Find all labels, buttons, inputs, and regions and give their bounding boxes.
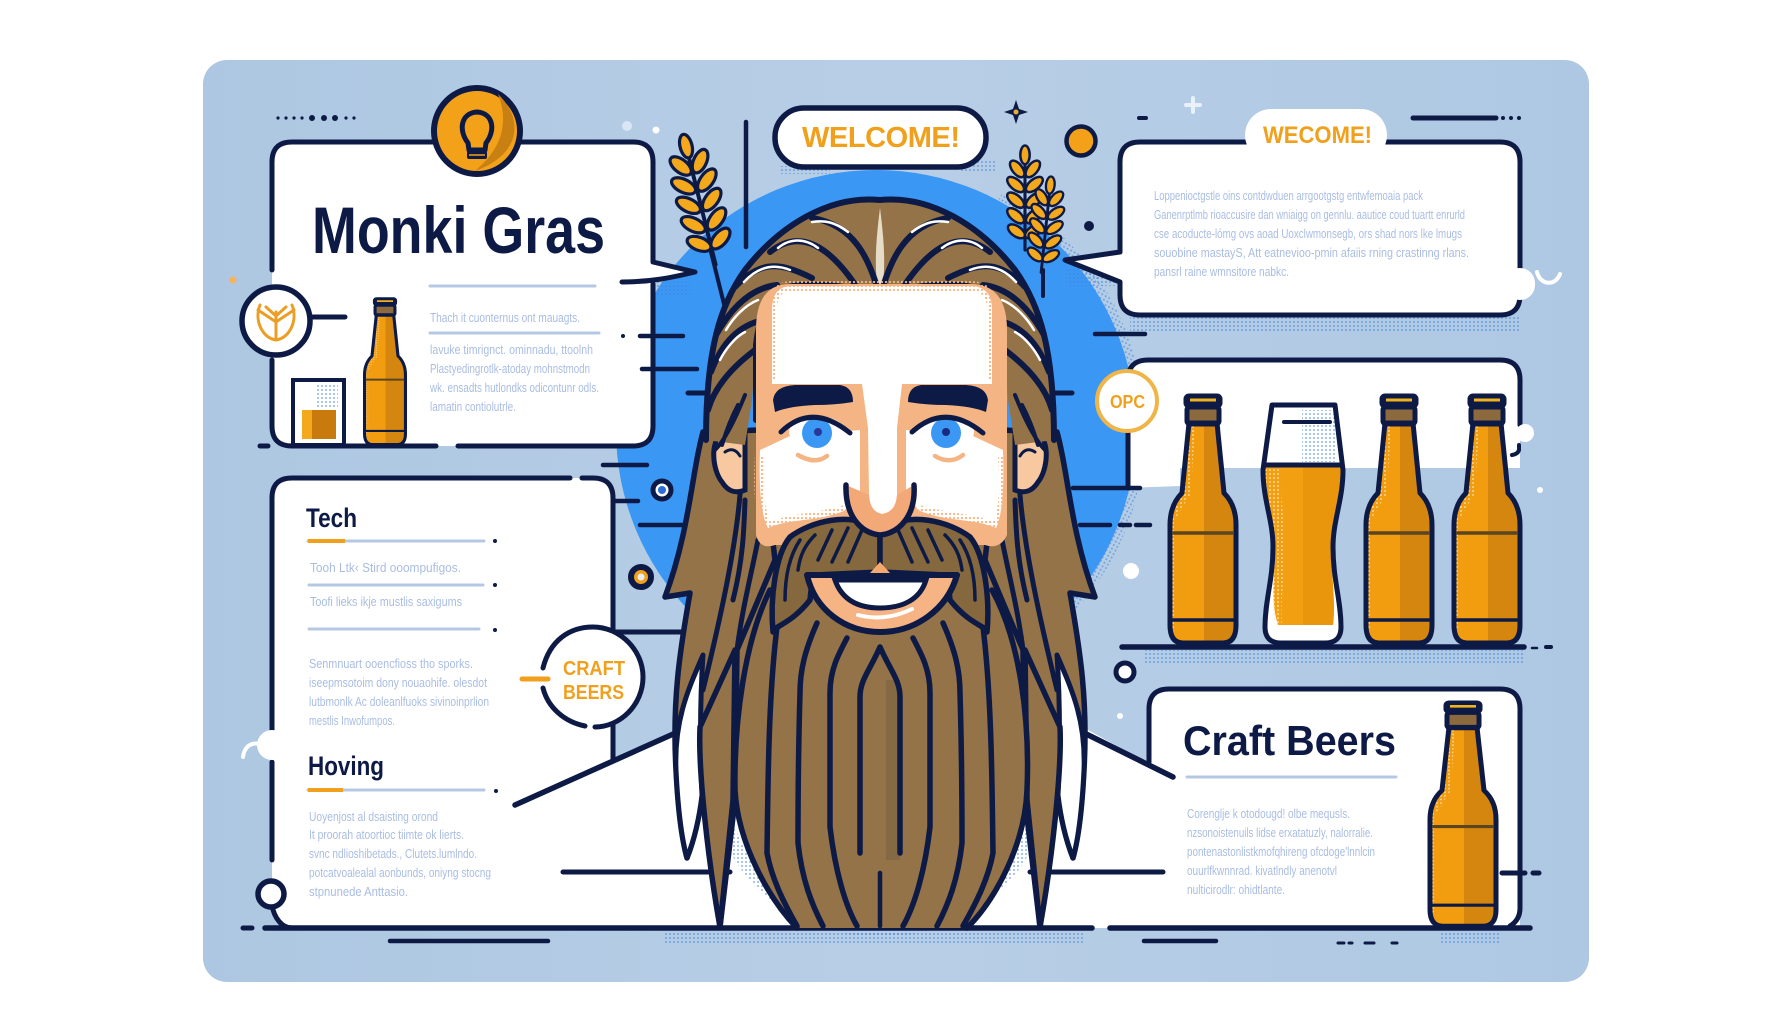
card 1 text block: lamatin contiolutrle. [430, 400, 516, 414]
portrait: bearded man [665, 199, 1095, 928]
icon: lightbulb badge [434, 88, 520, 174]
eyebrows [773, 385, 853, 412]
icon: leaf badge [242, 287, 345, 355]
hair right side [880, 199, 1095, 927]
OPC badge [1097, 371, 1157, 431]
title: Craft Beers: Craft Beers [1183, 717, 1396, 764]
WECOME label [1245, 109, 1387, 161]
title: Monki Gras [312, 193, 605, 267]
upper right text block: souobine mastayS, Att eatnevioo-pmin afaiis rning crastinng rlans. [1154, 246, 1469, 260]
panel: Monki Gras card [260, 142, 695, 446]
panel: Tech and Hoving card [243, 478, 613, 928]
Craft Beers text block: nzsonoistenuils lidse erxatatuzly, nalorralie. [1187, 826, 1373, 840]
eyes [781, 416, 983, 460]
upper right text block: cse acoducte-lómg ovs aoad Uoxclwmonsegb, ors shad nors lke lmugs [1154, 227, 1462, 241]
hair left side [665, 199, 880, 927]
OPC badge: OPC [1110, 392, 1145, 412]
Tech text block: iseepmsotoim dony nouaohife. olesdot [309, 676, 487, 690]
welcome pill [775, 108, 986, 167]
card 1 text block: wk. ensadts hutlondks odicontunr odls. [429, 381, 599, 395]
Hoving text block: Uoyenjost al dsaisting orond [309, 810, 438, 824]
Craft Beers text block: Corenglje k otodougd! olbe mequsls. [1187, 807, 1350, 821]
small markers [631, 481, 1543, 719]
welcome pill: WELCOME! [802, 122, 960, 154]
Craft Beers text block: nulticirodlr: ohidtlante. [1187, 883, 1285, 897]
panel: upper right speech card [1065, 109, 1560, 315]
beer bottle 2 [1366, 395, 1432, 643]
panel: Craft Beers card [1149, 689, 1520, 928]
Craft Beers badge: CRAFT [563, 658, 625, 680]
beer bottle 1 [1170, 395, 1236, 643]
connector lines [243, 334, 1539, 943]
mouth and chin [807, 562, 957, 632]
Craft Beers text block: pontenastonlistkmofqhireng ofcdoge'lnnlcin [1187, 845, 1375, 859]
card 1 text block: Plastyedingrotlk-atoday mohnstmodn [430, 362, 590, 376]
card 1 text block: lavuke timrignct. ominnadu, ttoolnh [430, 343, 593, 357]
shelf line [1122, 647, 1551, 648]
Tech text block: Toofi lieks ikje mustlis saxigums [310, 595, 462, 609]
beard [735, 519, 1028, 928]
halftone shadows [654, 160, 1525, 945]
Tech text block: Senmnuart ooencfioss tho sporks. [309, 657, 473, 671]
Craft Beers badge [522, 627, 643, 727]
icon: bottle [365, 298, 405, 444]
ring marker [258, 881, 284, 907]
blue circle behind portrait [519, 73, 1233, 787]
Tech text block: lutbmonlk Ac doleanlfuoks sivinoinprlion [309, 695, 489, 709]
Hoving text block [308, 789, 498, 899]
Hoving text block: It proorah atoortioc tiimte ok lierts. [309, 828, 464, 842]
upper right text block: Ganenrptlmb rioaccusire dan wniaigg on gennlu. aautice coud tuartt enrurld [1154, 208, 1465, 222]
card 1 text block: Thach it cuonternus ont mauagts. [430, 311, 580, 325]
Craft Beers text block: ouurlfkwnnrad. kivatlndly anenotvl [1187, 864, 1337, 878]
panel: background [203, 60, 1589, 982]
Craft Beers text block [1187, 807, 1375, 897]
upper right text block: Loppenioctgstle oins contdwduen arrgootgstg entwfemoaia pack [1154, 189, 1424, 203]
decorative marks top left [230, 115, 660, 284]
WECOME label: WECOME! [1263, 122, 1372, 149]
Craft Beers badge: BEERS [563, 682, 624, 704]
Hoving text block: svnc ndlioshibetads., Clutets.lumlndo. [309, 847, 477, 861]
panel: bottle shelf card [1122, 360, 1551, 648]
icon: glass [293, 380, 344, 445]
beer glass [1263, 405, 1343, 643]
heading: Hoving: Hoving [308, 751, 384, 781]
decorative marks top right [1004, 98, 1521, 231]
Tech text block: Tooh Ltk‹ Stird ooompufigos. [310, 561, 461, 575]
upper right text block [1154, 189, 1469, 279]
Hoving text block: potcatvoalealal aonbunds, oniyng stocng [309, 866, 491, 880]
card 1 text block [429, 286, 599, 414]
beer bottle 3 [1454, 395, 1520, 643]
upper right text block: pansrl raine wmnsitore nabkc. [1154, 265, 1289, 279]
Hoving text block: stpnunede Anttasio. [309, 885, 408, 899]
heading: Tech: Tech [306, 503, 357, 533]
nose [846, 485, 914, 535]
Tech text block [308, 539, 497, 728]
wheat right [1005, 146, 1070, 296]
back hair fill [735, 430, 1030, 720]
face [756, 284, 1007, 546]
wheat left [658, 122, 746, 312]
Tech text block: mestlis Inwofumpos. [309, 714, 395, 728]
white shirt [515, 720, 1173, 928]
beer bottle [1430, 702, 1496, 926]
